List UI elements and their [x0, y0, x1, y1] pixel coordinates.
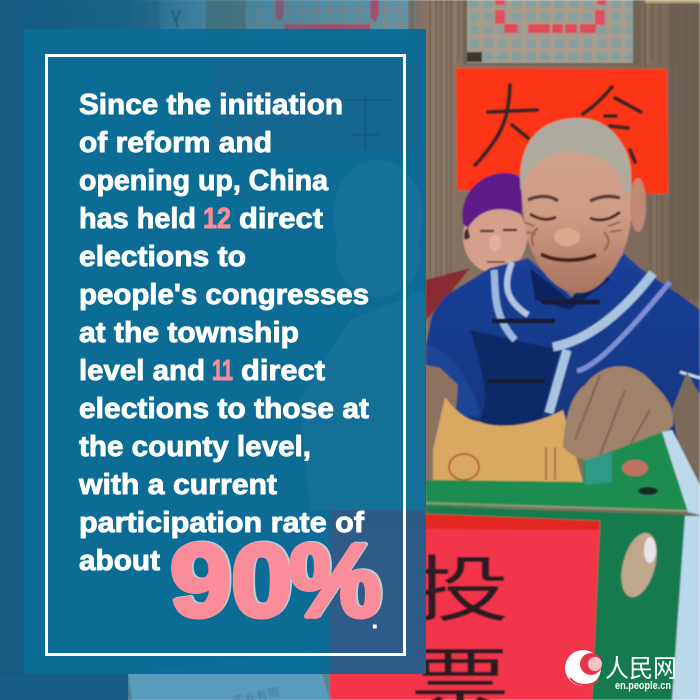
hands holding the ballot	[426, 365, 700, 482]
faint seated woman ghost	[300, 160, 425, 510]
main text block: with a current	[78, 469, 278, 501]
big statistic: 90%: %	[289, 523, 381, 638]
right lattice window	[463, 0, 639, 65]
main text block: Since the initiation	[79, 89, 343, 121]
logo url: en.people.cn	[615, 680, 671, 692]
white frame border	[46, 56, 404, 654]
background woman with purple hat	[462, 173, 527, 273]
main text block: elections to	[79, 241, 246, 273]
left lattice window	[246, 0, 408, 40]
main text block: the county level,	[79, 431, 311, 463]
big statistic: 90%: %	[291, 522, 383, 637]
panel: translucent blue text card	[24, 29, 426, 674]
big statistic: 90%: 90	[172, 522, 294, 637]
logo wordmark: 人民网	[605, 655, 677, 683]
characters on the paper	[410, 551, 510, 700]
big statistic: 90%: 90	[170, 523, 292, 638]
ballot box	[426, 430, 700, 700]
coat of the elderly man	[426, 252, 700, 470]
logo: People's Daily Online	[565, 650, 677, 692]
closing full stop: .	[372, 611, 378, 633]
main text block: direct	[239, 203, 324, 235]
main text block: direct	[241, 355, 326, 387]
red poster with brush characters	[456, 68, 668, 194]
main text block: about	[79, 545, 161, 577]
main text block: participation rate of	[79, 507, 365, 539]
elderly man's head	[520, 118, 646, 293]
main text block: level and	[79, 355, 205, 387]
seated woman's red jacket	[426, 268, 470, 320]
main text block: people's congresses	[79, 279, 369, 311]
main text block	[78, 89, 370, 577]
highlighted number: 11: 11	[212, 355, 233, 387]
big statistic: 90%	[170, 522, 383, 638]
red paper on ballot box	[330, 510, 600, 700]
main text block: opening up, China	[79, 165, 329, 197]
wood grain	[412, 0, 694, 340]
main text block: has held	[79, 203, 196, 235]
main text block: elections to those at	[79, 393, 370, 425]
top and left blue colour wash	[0, 0, 426, 700]
grey sack with printed text	[128, 650, 330, 700]
highlighted number: 12: 12	[203, 203, 231, 235]
faint poster character ghost	[345, 95, 392, 150]
main text block: at the township	[79, 317, 299, 349]
icon: swirl emblem	[565, 650, 602, 686]
far left lattice window	[30, 0, 120, 28]
characters on the paper: 投	[410, 551, 510, 631]
main text block: of reform and	[79, 127, 272, 159]
